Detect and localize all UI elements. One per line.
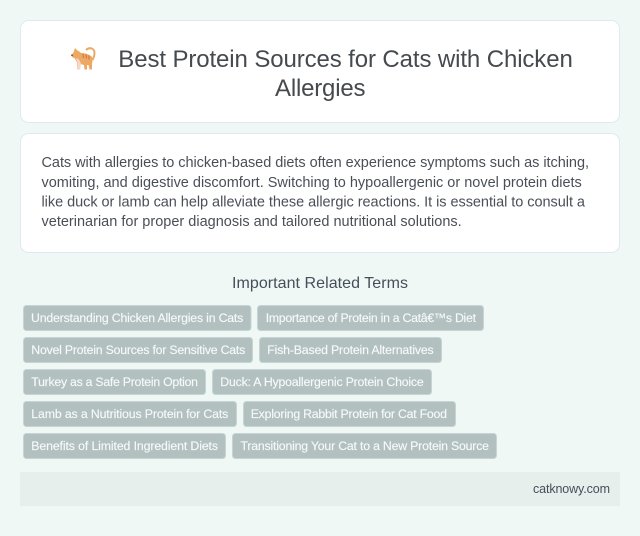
footer <box>20 472 620 506</box>
tag: Fish-Based Protein Alternatives <box>267 343 434 357</box>
tags: related terms <box>24 306 496 458</box>
tag <box>212 370 432 394</box>
tag <box>24 434 226 458</box>
tag <box>24 370 206 394</box>
tag <box>24 338 252 362</box>
tag: Lamb as a Nutritious Protein for Cats <box>31 407 228 421</box>
text block: description: like duck or lamb can help alleviate these allergic reactions. It is essential to consult a <box>42 194 586 210</box>
text block: description: Cats with allergies to chicken-based diets often experience symptoms such as itching, <box>42 155 589 171</box>
tag <box>258 306 484 330</box>
text block: description: veterinarian for proper diagnosis and tailored nutritional solutions. <box>42 214 462 230</box>
panel: description <box>20 134 620 252</box>
tag <box>244 402 456 426</box>
panel: title card <box>20 20 620 122</box>
footer: catknowy.com <box>533 482 610 496</box>
tag <box>260 338 442 362</box>
tag: Understanding Chicken Allergies in Cats <box>31 311 243 325</box>
tag: Novel Protein Sources for Sensitive Cats <box>31 343 245 357</box>
tag <box>24 402 236 426</box>
title <box>118 46 573 102</box>
tag <box>232 434 496 458</box>
title: Best Protein Sources for Cats with Chicken <box>118 46 573 73</box>
heading: related terms: Important Related Terms <box>232 275 408 292</box>
tag: Exploring Rabbit Protein for Cat Food <box>251 407 447 421</box>
tag <box>24 306 251 330</box>
text block: description: vomiting, and digestive discomfort. Switching to hypoallergenic or novel protein diets <box>42 175 582 191</box>
tag: Turkey as a Safe Protein Option <box>31 375 198 389</box>
tag: Transitioning Your Cat to a New Protein Source <box>240 439 489 453</box>
tag: Importance of Protein in a Catâ€™s Diet <box>266 311 477 325</box>
tag: Benefits of Limited Ingredient Diets <box>31 439 218 453</box>
tag: Duck: A Hypoallergenic Protein Choice <box>220 375 424 389</box>
text block: description <box>42 155 589 230</box>
title: Allergies <box>275 75 366 102</box>
icon: cat <box>71 48 94 70</box>
